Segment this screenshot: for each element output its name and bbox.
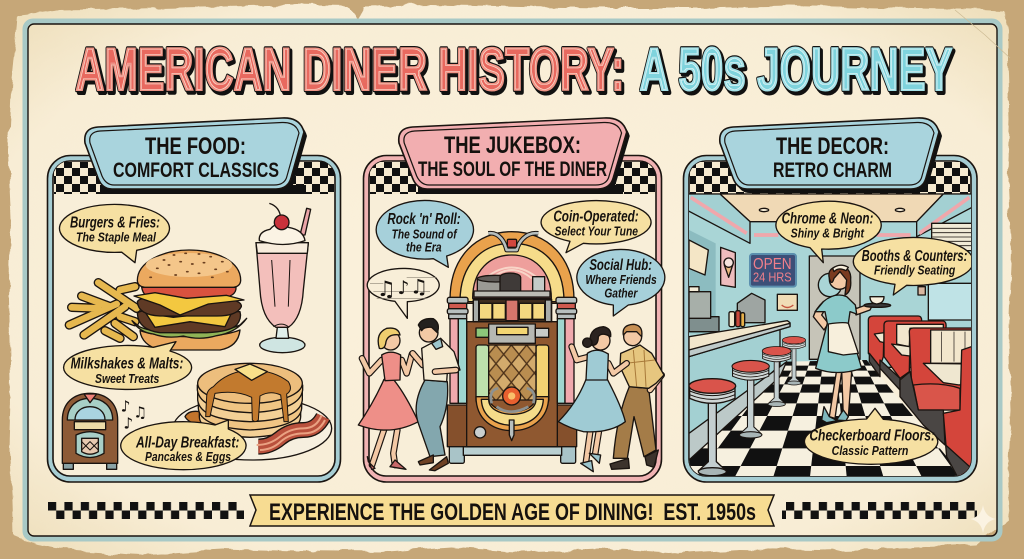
counter with coffee machine bbox=[689, 287, 790, 460]
callout: music notes bubble: ♫ bbox=[410, 274, 428, 298]
panel: the decor bbox=[682, 154, 978, 483]
heading tab: the food bbox=[85, 118, 307, 193]
footer checker strip right bbox=[782, 502, 977, 519]
diner walls and ceiling bbox=[687, 194, 973, 367]
heading tab: the food: COMFORT CLASSICS bbox=[113, 159, 279, 182]
icon: pancakes and bacon bbox=[173, 363, 332, 460]
sparkle mark bbox=[970, 505, 996, 533]
checkerboard floor bbox=[689, 360, 962, 476]
heading tab: the food: THE FOOD: bbox=[145, 133, 246, 160]
callout: booths and counters: Friendly Seating bbox=[874, 263, 955, 278]
icon: music notes: ♪ bbox=[121, 398, 130, 416]
callout: music notes bubble bbox=[367, 268, 439, 318]
callout: rock n roll bbox=[376, 200, 473, 267]
footer checker strip left bbox=[48, 502, 244, 519]
callout: coin-operated: Coin-Operated: bbox=[553, 209, 639, 226]
callout: rock n roll: the Era bbox=[406, 240, 442, 255]
heading tab: the decor: THE DECOR: bbox=[776, 133, 889, 160]
callout: milkshakes and malts: Milkshakes & Malts: bbox=[71, 355, 183, 372]
icon: music notes bbox=[121, 398, 147, 432]
callout: all-day breakfast: All-Day Breakfast: bbox=[135, 434, 239, 451]
footer banner bbox=[250, 495, 774, 526]
callout: checkerboard floors bbox=[804, 408, 938, 464]
jukebox illustrations and callouts bbox=[358, 200, 665, 472]
neon open sign bbox=[754, 258, 792, 282]
callout: chrome and neon: Shiny & Bright bbox=[791, 225, 864, 240]
decor panel frame bbox=[684, 156, 977, 482]
figure: dark-haired dancer in white shirt bbox=[413, 319, 460, 471]
stools bbox=[689, 336, 806, 476]
callout: coin-operated bbox=[541, 201, 651, 253]
callout: rock n roll: The Sound of bbox=[392, 226, 458, 241]
neon open sign: 24 HRS bbox=[753, 270, 792, 284]
callout: milkshakes and malts bbox=[64, 342, 192, 389]
icon: burger bbox=[132, 250, 247, 350]
panel: the food bbox=[48, 156, 340, 482]
icon: french fries bbox=[69, 283, 137, 338]
callout: music notes bubble: ♪ bbox=[397, 278, 409, 299]
callout: burgers and fries: The Staple Meal bbox=[76, 229, 156, 244]
heading tab: the jukebox bbox=[399, 118, 630, 193]
callout: music notes bubble: ♫ bbox=[377, 277, 396, 302]
figure: dancer in blue dress and partner in plaid bbox=[558, 324, 664, 472]
food illustrations and callouts bbox=[59, 203, 332, 470]
callout: burgers and fries bbox=[59, 204, 169, 263]
callout: burgers and fries: Burgers & Fries: bbox=[70, 214, 160, 231]
heading tab: the jukebox: THE JUKEBOX: bbox=[444, 132, 581, 159]
callout: chrome and neon: Chrome & Neon: bbox=[782, 210, 873, 227]
icon: mini jukebox bbox=[62, 393, 118, 469]
callout: social hub: Where Friends bbox=[585, 272, 657, 287]
red booths bbox=[868, 316, 973, 478]
callout: social hub: Social Hub: bbox=[589, 257, 652, 274]
figure: blonde dancer in pink dress bbox=[358, 328, 418, 469]
jukebox panel frame bbox=[364, 156, 662, 482]
callout: checkerboard floors: Classic Pattern bbox=[832, 443, 908, 458]
callout: all-day breakfast bbox=[121, 420, 246, 470]
callout: milkshakes and malts: Sweet Treats bbox=[95, 371, 159, 386]
callout: all-day breakfast: Pancakes & Eggs bbox=[145, 449, 231, 464]
title: red part: AMERICAN DINER HISTORY: bbox=[76, 36, 624, 103]
decor scene and callouts bbox=[689, 193, 971, 476]
illustration: jukebox bbox=[447, 232, 577, 463]
figure: waitress bbox=[813, 265, 891, 423]
callout: chrome and neon bbox=[776, 201, 881, 263]
icon: music notes: ♫ bbox=[133, 403, 147, 421]
heading tab: the decor: RETRO CHARM bbox=[773, 159, 892, 182]
callout: checkerboard floors: Checkerboard Floors: bbox=[809, 428, 935, 445]
heading tab: the jukebox: THE SOUL OF THE DINER bbox=[418, 158, 607, 181]
callout: rock n roll: Rock 'n' Roll: bbox=[387, 211, 461, 228]
callout: social hub: Gather bbox=[604, 285, 638, 300]
icon: music notes: ♪ bbox=[123, 414, 133, 432]
callout: booths and counters bbox=[853, 237, 973, 295]
title: red part bbox=[76, 36, 626, 106]
panel: the jukebox bbox=[358, 156, 665, 482]
title bbox=[76, 36, 954, 106]
food panel frame bbox=[48, 156, 340, 482]
callout: social hub bbox=[577, 249, 665, 316]
callout: booths and counters: Booths & Counters: bbox=[862, 248, 967, 265]
icon: milkshake bbox=[256, 203, 311, 353]
heading tab: the decor bbox=[720, 118, 942, 193]
callout: coin-operated: Select Your Tune bbox=[555, 223, 638, 238]
title: red part: AMERICAN DINER HISTORY: bbox=[76, 36, 624, 103]
neon open sign: OPEN bbox=[753, 256, 792, 273]
title: red part: AMERICAN DINER HISTORY: bbox=[78, 38, 626, 106]
footer banner: EXPERIENCE THE GOLDEN AGE OF DINING! EST. 1950s bbox=[269, 499, 756, 526]
